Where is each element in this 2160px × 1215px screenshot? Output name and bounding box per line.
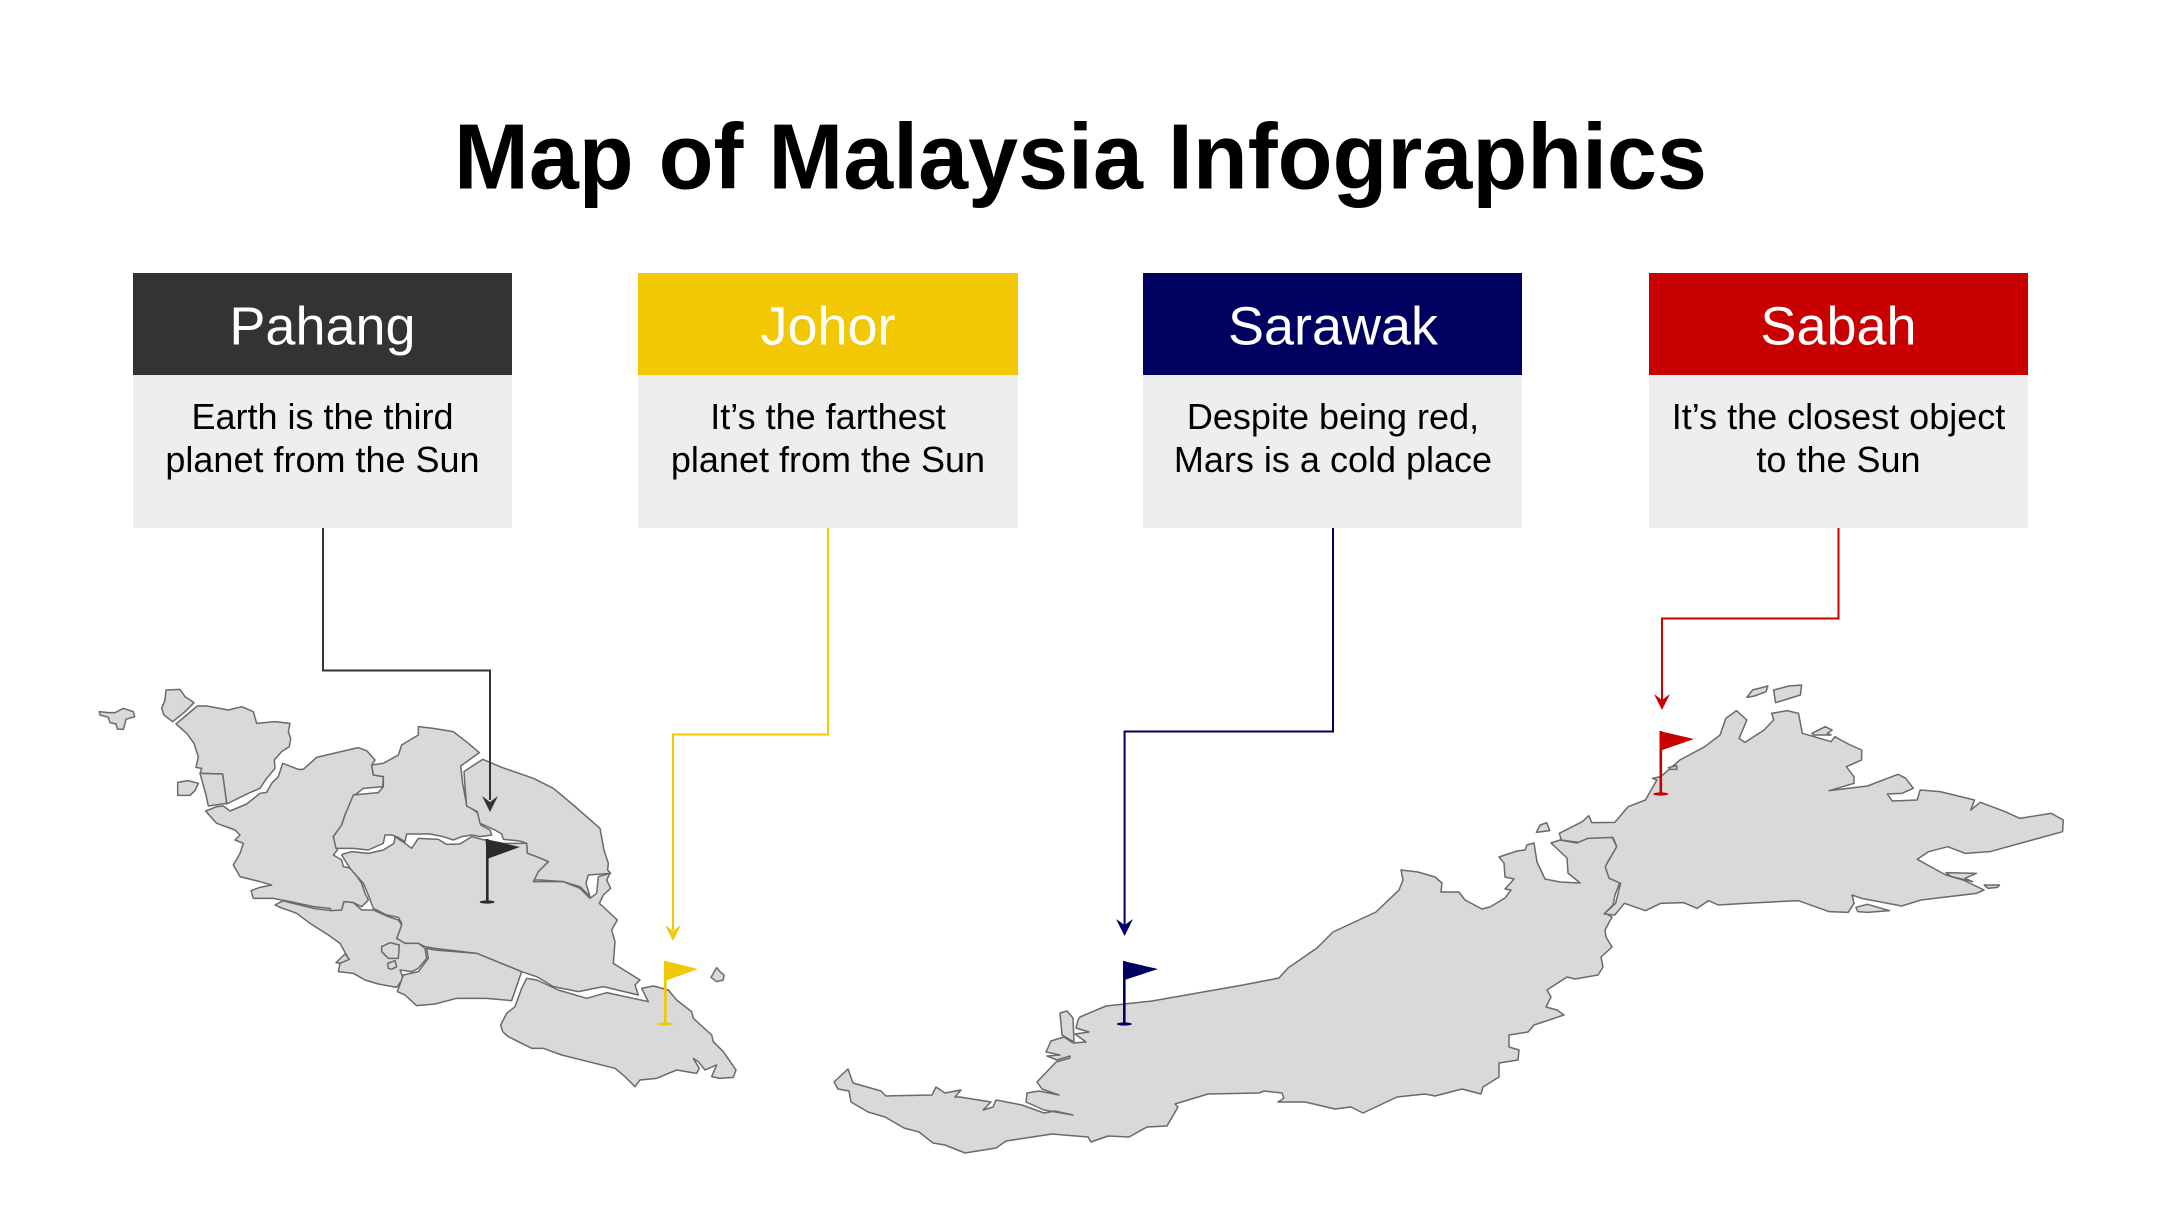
card body (1649, 375, 2028, 528)
title: Map of Malaysia Infographics (454, 104, 1707, 208)
description: It’s the farthest (710, 396, 946, 437)
header label: Sabah (1760, 296, 1917, 356)
island: Langkawi (99, 708, 135, 729)
card header (1649, 273, 2028, 375)
card: Sarawak (1143, 273, 1522, 528)
description: Mars is a cold place (1174, 439, 1492, 480)
card body (638, 375, 1018, 528)
state: Terengganu (464, 759, 611, 897)
arrow: Sarawak connector (1116, 528, 1333, 936)
lake outline (382, 943, 399, 958)
island: Jambongan (1812, 727, 1832, 735)
header label: Johor (760, 296, 896, 356)
description: planet from the Sun (165, 439, 480, 480)
mainland Sabah (1559, 711, 2063, 915)
card body (133, 375, 512, 528)
coastal islet (336, 954, 349, 963)
description: Earth is the third (191, 396, 454, 437)
state: Perlis (162, 689, 194, 722)
description: planet from the Sun (671, 439, 985, 480)
island: Penang (178, 781, 198, 795)
icon: Johor flag (658, 961, 698, 1026)
state: Pahang (342, 837, 640, 995)
island: Balambangan (1747, 686, 1768, 697)
card header (133, 273, 512, 375)
header label: Pahang (229, 296, 416, 356)
state: Selangor and Melaka (275, 901, 427, 987)
arrow: Pahang connector (323, 528, 498, 812)
card body (1143, 375, 1522, 528)
map: Sabah (1536, 685, 2063, 915)
map: Sarawak (834, 837, 1620, 1153)
map: Peninsular Malaysia (99, 689, 640, 1006)
card: Johor (638, 273, 1018, 528)
island: Banggi (1774, 685, 1802, 703)
card header (638, 273, 1018, 375)
island: Bruit (1060, 1011, 1074, 1042)
lake outline small (388, 961, 397, 969)
arrow: Sabah connector (1654, 528, 1838, 710)
island: Darvel islet (1946, 873, 1976, 882)
state: Negeri Sembilan (397, 948, 522, 1006)
header label: Sarawak (1228, 296, 1439, 356)
mainland Sarawak (834, 837, 1620, 1153)
icon: Sarawak flag (1117, 961, 1158, 1026)
card: Sabah (1649, 273, 2028, 528)
island: Tioman (711, 968, 724, 982)
state: Kelantan (333, 727, 492, 850)
description: It’s the closest object (1672, 396, 2005, 437)
card header (1143, 273, 1522, 375)
icon: Sabah flag (1653, 731, 1694, 796)
state: Seberang Perai (200, 773, 227, 806)
state: Kedah (176, 706, 291, 804)
island: east islet (1984, 885, 1999, 888)
state: Johor (501, 978, 736, 1087)
card: Pahang (133, 273, 512, 528)
island: coastal sliver (1668, 766, 1677, 769)
icon: Pahang flag (480, 839, 520, 904)
map: Johor (501, 968, 736, 1087)
state: Perak (206, 748, 383, 912)
description: Despite being red, (1187, 396, 1479, 437)
description: to the Sun (1756, 439, 1921, 480)
arrow: Johor connector (665, 528, 828, 941)
island: Sebatik (1856, 904, 1890, 912)
island: Labuan (1536, 823, 1550, 832)
